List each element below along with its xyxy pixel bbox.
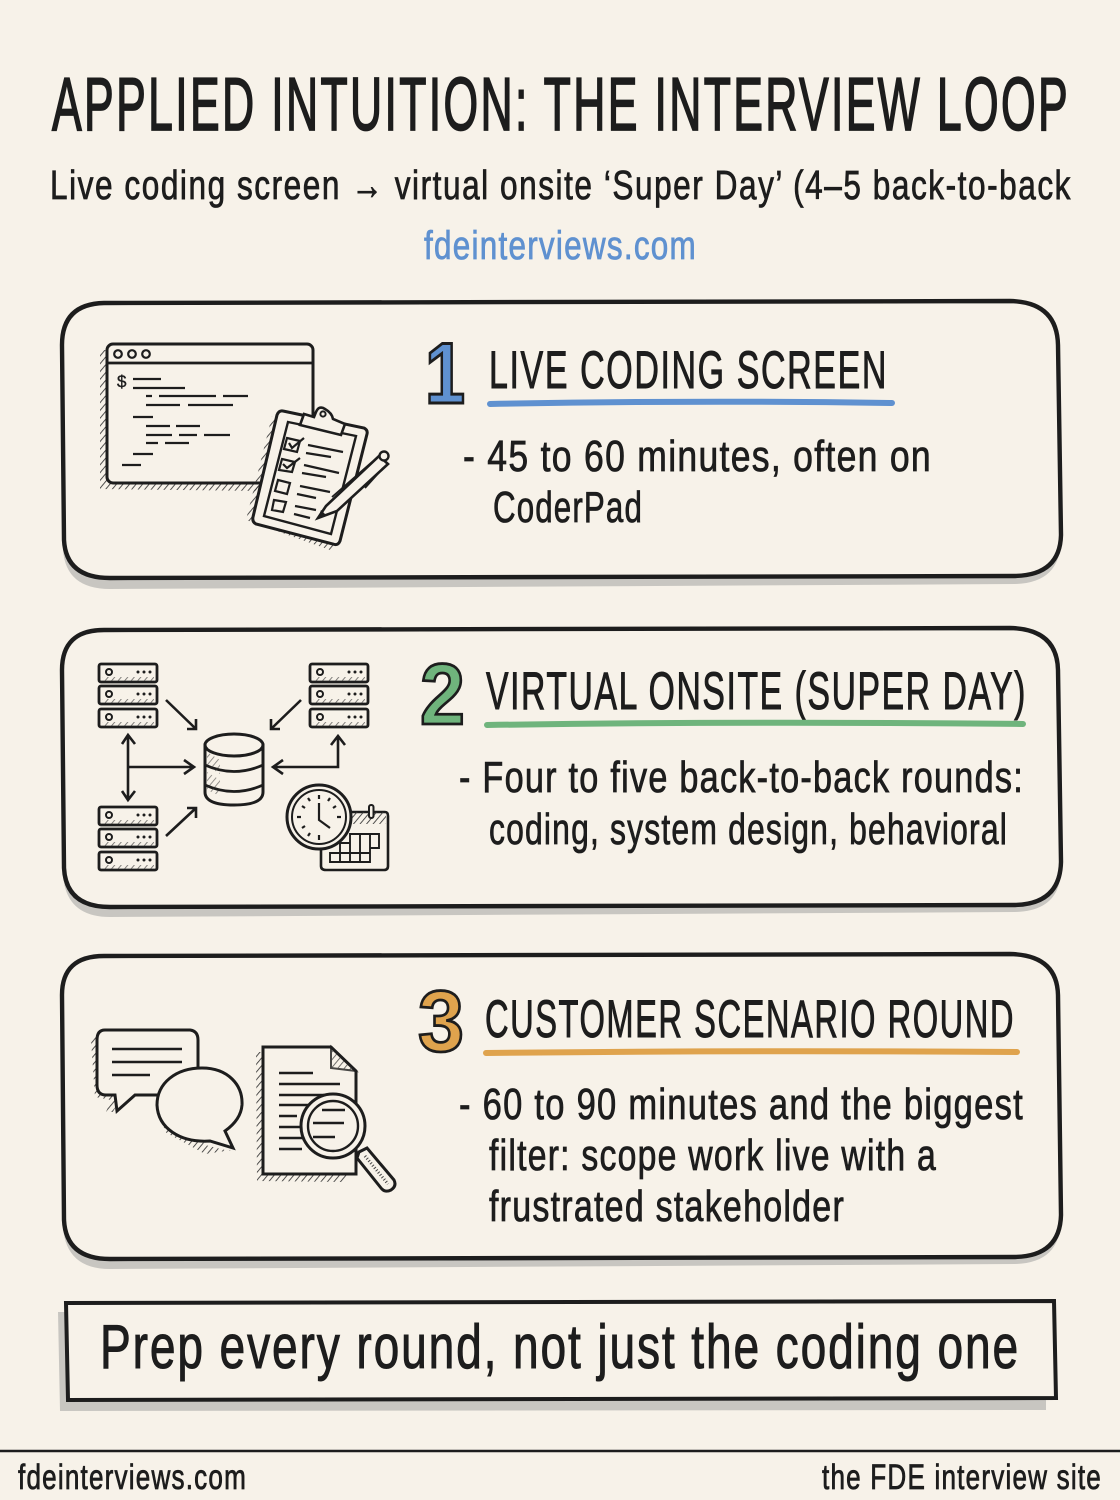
body text: frustrated stakeholder xyxy=(489,1182,845,1231)
icon: clock and calendar xyxy=(287,785,388,870)
icon: speech bubbles xyxy=(91,1030,242,1154)
panel: customer scenario round xyxy=(62,954,1061,1269)
icon: document with magnifier xyxy=(256,1047,395,1191)
database xyxy=(205,734,263,805)
body text: CoderPad xyxy=(493,483,643,532)
footer: fdeinterviews.com xyxy=(18,1458,247,1497)
site link: fdeinterviews.com xyxy=(424,224,697,268)
panel: virtual onsite xyxy=(62,628,1061,917)
body text: filter: scope work live with a xyxy=(489,1131,937,1180)
underline xyxy=(487,723,1023,725)
icon: code window xyxy=(100,344,313,491)
body text xyxy=(459,1080,1024,1231)
icon: clipboard and pen xyxy=(246,408,388,550)
body text xyxy=(459,753,1024,854)
panel: live coding screen xyxy=(62,301,1061,589)
callout banner xyxy=(58,1301,1056,1411)
number 2: 2 xyxy=(420,647,465,743)
icon: server network with database xyxy=(99,664,368,870)
icon: code window: $ xyxy=(117,372,127,391)
underline xyxy=(486,1051,1017,1053)
body text xyxy=(463,432,932,532)
body text: - 45 to 60 minutes, often on xyxy=(463,432,932,481)
underline xyxy=(490,402,892,404)
number 1: 1 xyxy=(425,326,465,422)
number 3: 3 xyxy=(418,974,464,1070)
footer xyxy=(0,1451,1120,1497)
heading: live coding screen: LIVE CODING SCREEN xyxy=(489,341,888,400)
